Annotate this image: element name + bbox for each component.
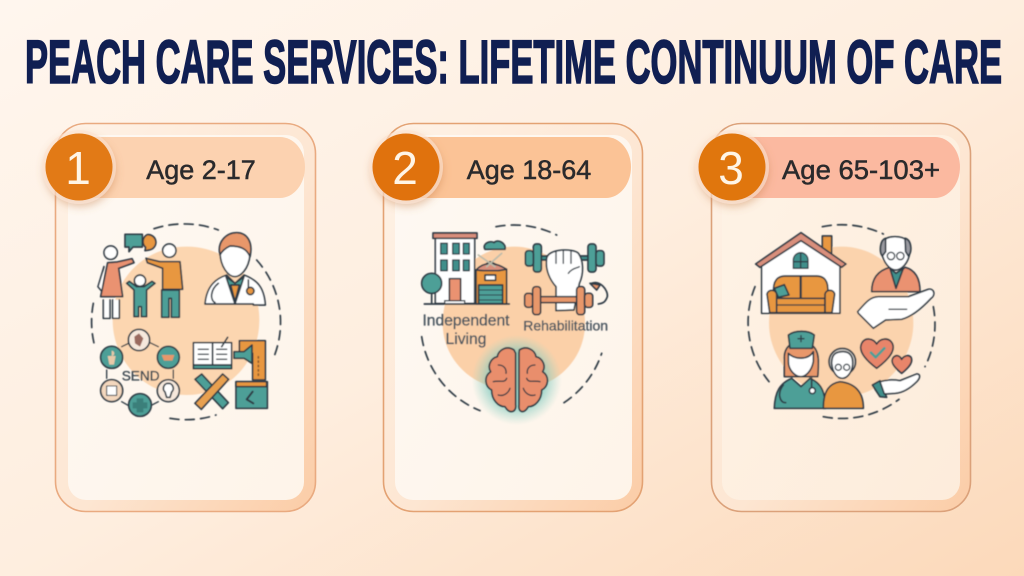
- age pill: [410, 137, 631, 198]
- icon: open hand: [858, 289, 934, 328]
- card inner panel: [722, 135, 960, 500]
- age label: Age 2-17: [146, 155, 256, 185]
- icon: SEND network: [101, 329, 179, 416]
- icon: learning tools: [193, 337, 267, 409]
- label: rehabilitation: Rehabilitation: [523, 318, 608, 334]
- number badge 2: [369, 130, 443, 204]
- illustration: children and SEND services: [92, 224, 281, 420]
- age label: Age 65-103+: [782, 155, 940, 185]
- card frame: [712, 124, 970, 512]
- icon: family: [98, 234, 183, 318]
- icon: doctor: [205, 233, 265, 305]
- card inner panel: [395, 135, 632, 500]
- number badge 1: [42, 130, 116, 204]
- card frame: [384, 124, 642, 512]
- panel: age 2-17: [42, 124, 316, 512]
- age pill: [735, 137, 960, 198]
- dashed ring: [748, 225, 935, 418]
- age label: Age 18-64: [467, 155, 591, 185]
- icon: apartment building: [422, 233, 509, 304]
- number badge 3: [695, 130, 769, 204]
- label: independent living: Living: [446, 331, 486, 348]
- number badge 3: 3: [718, 142, 744, 194]
- illustration: independent living and rehabilitation: [422, 225, 608, 425]
- peach blob: [443, 247, 585, 390]
- icon: senior man: [872, 237, 920, 292]
- icon: house with sofa: [756, 233, 846, 313]
- dashed ring: [422, 225, 602, 411]
- peach blob: [113, 247, 259, 395]
- panel: age 65-103+: [695, 124, 970, 512]
- illustration: senior care: [748, 225, 935, 418]
- icon: SEND network: SEND: [122, 369, 160, 384]
- label: independent living: Independent: [422, 313, 510, 330]
- card inner panel: [68, 135, 304, 500]
- number badge 1: 1: [65, 142, 91, 194]
- icon: hearts and caring hand: [861, 339, 920, 397]
- card frame: [56, 124, 316, 512]
- label: independent living: [422, 313, 510, 348]
- peach blob: [769, 247, 913, 397]
- age pill: [80, 137, 305, 198]
- icon: nurse and senior woman: [774, 331, 863, 408]
- icon: brain: [472, 335, 562, 425]
- panel: age 18-64: [369, 124, 642, 512]
- icon: fist and dumbbells: [525, 244, 607, 315]
- number badge 2: 2: [392, 142, 418, 194]
- dashed ring: [92, 224, 281, 420]
